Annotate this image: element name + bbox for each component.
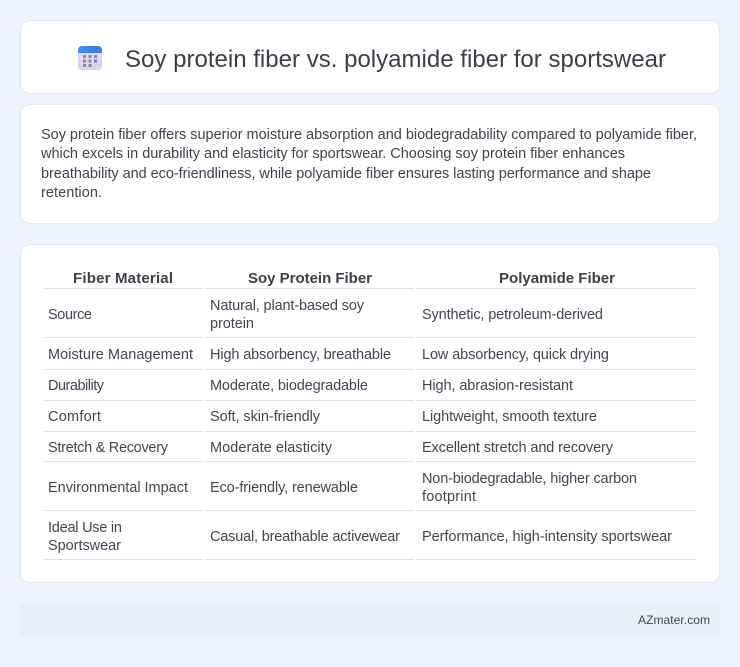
row: moisture management: Moisture Management: [48, 347, 193, 363]
row: stretch and recovery: [48, 440, 614, 456]
row: moisture management: High absorbency, breathable: [210, 347, 391, 363]
row: stretch and recovery: Moderate elasticity: [210, 440, 333, 456]
row: ideal use in sportswear: [48, 520, 672, 554]
table header: Soy Protein Fiber: [248, 270, 372, 287]
row: source: Source: [48, 307, 92, 323]
footer source: AZmater.com: [638, 613, 710, 627]
row: ideal use in sportswear: Casual, breathable activewear: [210, 529, 400, 545]
row: source: Synthetic, petroleum-derived: [422, 307, 603, 323]
row: comfort: Lightweight, smooth texture: [422, 409, 597, 425]
footer bar: [20, 603, 720, 637]
row: stretch and recovery: Excellent stretch and recovery: [422, 440, 614, 456]
row: ideal use in sportswear: Performance, high-intensity sportswear: [422, 529, 672, 545]
summary text: which excels in durability and elasticity for sportswear. Choosing soy protein fiber enhances: [40, 146, 625, 162]
row: ideal use in sportswear: Sportswear: [48, 538, 121, 554]
row: environmental impact: Eco-friendly, renewable: [210, 480, 358, 496]
row: environmental impact: [48, 471, 637, 505]
row: environmental impact: footprint: [422, 489, 476, 505]
row: durability: High, abrasion-resistant: [422, 378, 573, 394]
row: environmental impact: Environmental Impact: [48, 480, 188, 496]
row: source: Natural, plant-based soy: [210, 298, 365, 314]
title: Soy protein fiber vs. polyamide fiber for sportswear: [125, 46, 666, 73]
table header: Polyamide Fiber: [499, 270, 615, 287]
row: source: protein: [210, 316, 254, 332]
panel: comparison table: [20, 244, 720, 582]
row: ideal use in sportswear: Ideal Use in: [48, 520, 122, 536]
row: comfort: Soft, skin-friendly: [210, 409, 321, 425]
panel: title card: [20, 20, 720, 94]
row: durability: [48, 378, 573, 394]
row: source: [48, 298, 603, 332]
row: environmental impact: Non-biodegradable, higher carbon: [422, 471, 637, 487]
summary text: retention.: [41, 185, 102, 201]
row: durability: Durability: [48, 378, 105, 394]
summary text: [40, 127, 697, 201]
row: comfort: Comfort: [48, 409, 101, 425]
summary text: Soy protein fiber offers superior moisture absorption and biodegradability compared to polyamide fiber,: [41, 127, 697, 143]
row: moisture management: [48, 347, 609, 363]
table header: [73, 270, 615, 287]
row: durability: Moderate, biodegradable: [210, 378, 368, 394]
row: moisture management: Low absorbency, quick drying: [422, 347, 609, 363]
panel: summary: [20, 104, 720, 224]
icon: calendar: [78, 46, 102, 70]
row: stretch and recovery: Stretch & Recovery: [48, 440, 169, 456]
row: comfort: [48, 409, 597, 425]
table header: Fiber Material: [73, 270, 173, 287]
summary text: breathability and eco-friendliness, while polyamide fiber ensures lasting performance and shape: [41, 166, 651, 182]
